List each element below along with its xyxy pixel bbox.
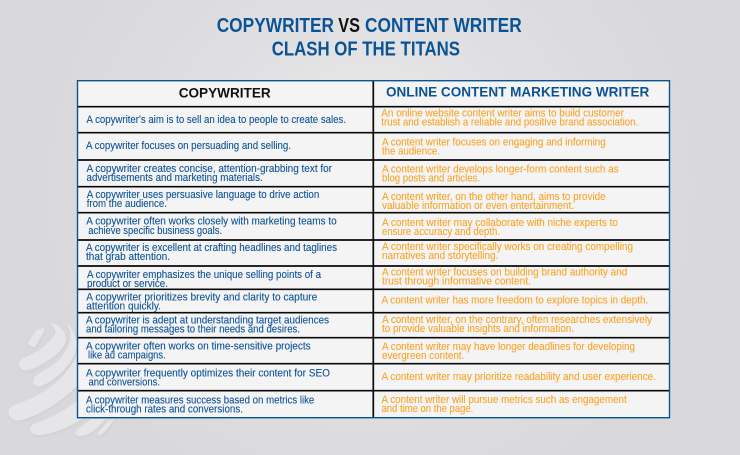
- title: VS: [338, 15, 360, 37]
- content writer column text: An online website content writer aims to build customer: [381, 108, 624, 120]
- copywriter column text: A copywriter is excellent at crafting headlines and taglines: [86, 242, 338, 254]
- copywriter column text: product or service.: [87, 278, 168, 290]
- copywriter column text: A copywriter creates concise, attention-grabbing text for: [86, 163, 332, 175]
- content writer column text: evergreen content.: [382, 350, 464, 362]
- content writer column text: valuable information or even entertainment.: [382, 200, 574, 212]
- title: CLASH OF THE TITANS: [272, 39, 460, 61]
- copywriter column text: like ad campaigns.: [88, 350, 166, 362]
- title: CONTENT WRITER: [365, 15, 522, 37]
- content writer column text: A content writer, on the contrary, often researches extensively: [382, 314, 653, 326]
- row dividers and column divider: [78, 81, 670, 417]
- copywriter column text: from the audience.: [87, 198, 167, 210]
- table background: [78, 81, 670, 418]
- content writer column text: A content writer develops longer-form content such as: [382, 164, 619, 176]
- comparison table: [78, 81, 670, 418]
- content writer column text: A content writer may collaborate with niche experts to: [382, 217, 618, 229]
- content writer column text: A content writer focuses on engaging and informing: [382, 137, 606, 149]
- header: online content marketing writer: ONLINE CONTENT MARKETING WRITER: [386, 84, 649, 100]
- copywriter column text: advertisements and marketing materials.: [86, 172, 263, 184]
- table outer border: [78, 81, 670, 418]
- copywriter column text: [86, 114, 346, 416]
- title: [217, 15, 522, 61]
- content writer column text: and time on the page.: [382, 403, 473, 415]
- content writer column text: A content writer focuses on building brand authority and: [382, 267, 627, 279]
- content writer column text: the audience.: [382, 146, 440, 158]
- copywriter column text: A copywriter often works on time-sensitive projects: [86, 341, 311, 353]
- copywriter column text: A copywriter emphasizes the unique selling points of a: [87, 269, 321, 281]
- copywriter column text: A copywriter focuses on persuading and selling.: [86, 140, 291, 152]
- copywriter column text: A copywriter measures success based on metrics like: [86, 395, 314, 407]
- title: COPYWRITER: [217, 15, 334, 37]
- copywriter column text: and conversions.: [88, 377, 160, 389]
- content writer column text: A content writer has more freedom to explore topics in depth.: [382, 295, 648, 307]
- content writer column text: ensure accuracy and depth.: [382, 226, 500, 238]
- copywriter column text: and tailoring messages to their needs and desires.: [86, 324, 300, 336]
- content writer column text: trust through informative content.: [382, 276, 531, 288]
- decorative swirl emblem: [9, 323, 114, 436]
- copywriter column text: click-through rates and conversions.: [86, 404, 243, 416]
- copywriter column text: A copywriter frequently optimizes their content for SEO: [86, 368, 330, 380]
- copywriter column text: A copywriter prioritizes brevity and clarity to capture: [86, 292, 317, 304]
- header: copywriter: COPYWRITER: [179, 85, 271, 101]
- content writer column text: blog posts and articles.: [382, 173, 480, 185]
- content writer column text: narratives and storytelling.: [382, 250, 498, 262]
- copywriter column text: A copywriter is adept at understanding target audiences: [86, 315, 330, 327]
- copywriter column text: A copywriter uses persuasive language to drive action: [87, 189, 319, 201]
- content writer column text: trust and establish a reliable and positive brand association.: [381, 117, 638, 129]
- content writer column text: A content writer will pursue metrics such as engagement: [382, 394, 627, 406]
- copywriter column text: A copywriter often works closely with marketing teams to: [86, 216, 337, 228]
- content writer column text: to provide valuable insights and information.: [382, 323, 574, 335]
- content writer column text: A content writer may prioritize readability and user experience.: [382, 371, 656, 383]
- content writer column text: [381, 108, 656, 415]
- copywriter column text: attention quickly.: [86, 300, 161, 312]
- copywriter column text: achieve specific business goals.: [88, 225, 222, 237]
- content writer column text: A content writer may have longer deadlines for developing: [382, 341, 635, 353]
- copywriter column text: A copywriter's aim is to sell an idea to people to create sales.: [86, 114, 346, 126]
- copywriter column text: that grab attention.: [86, 251, 170, 263]
- content writer column text: A content writer, on the other hand, aims to provide: [382, 191, 606, 203]
- content writer column text: A content writer specifically works on creating compelling: [382, 241, 633, 253]
